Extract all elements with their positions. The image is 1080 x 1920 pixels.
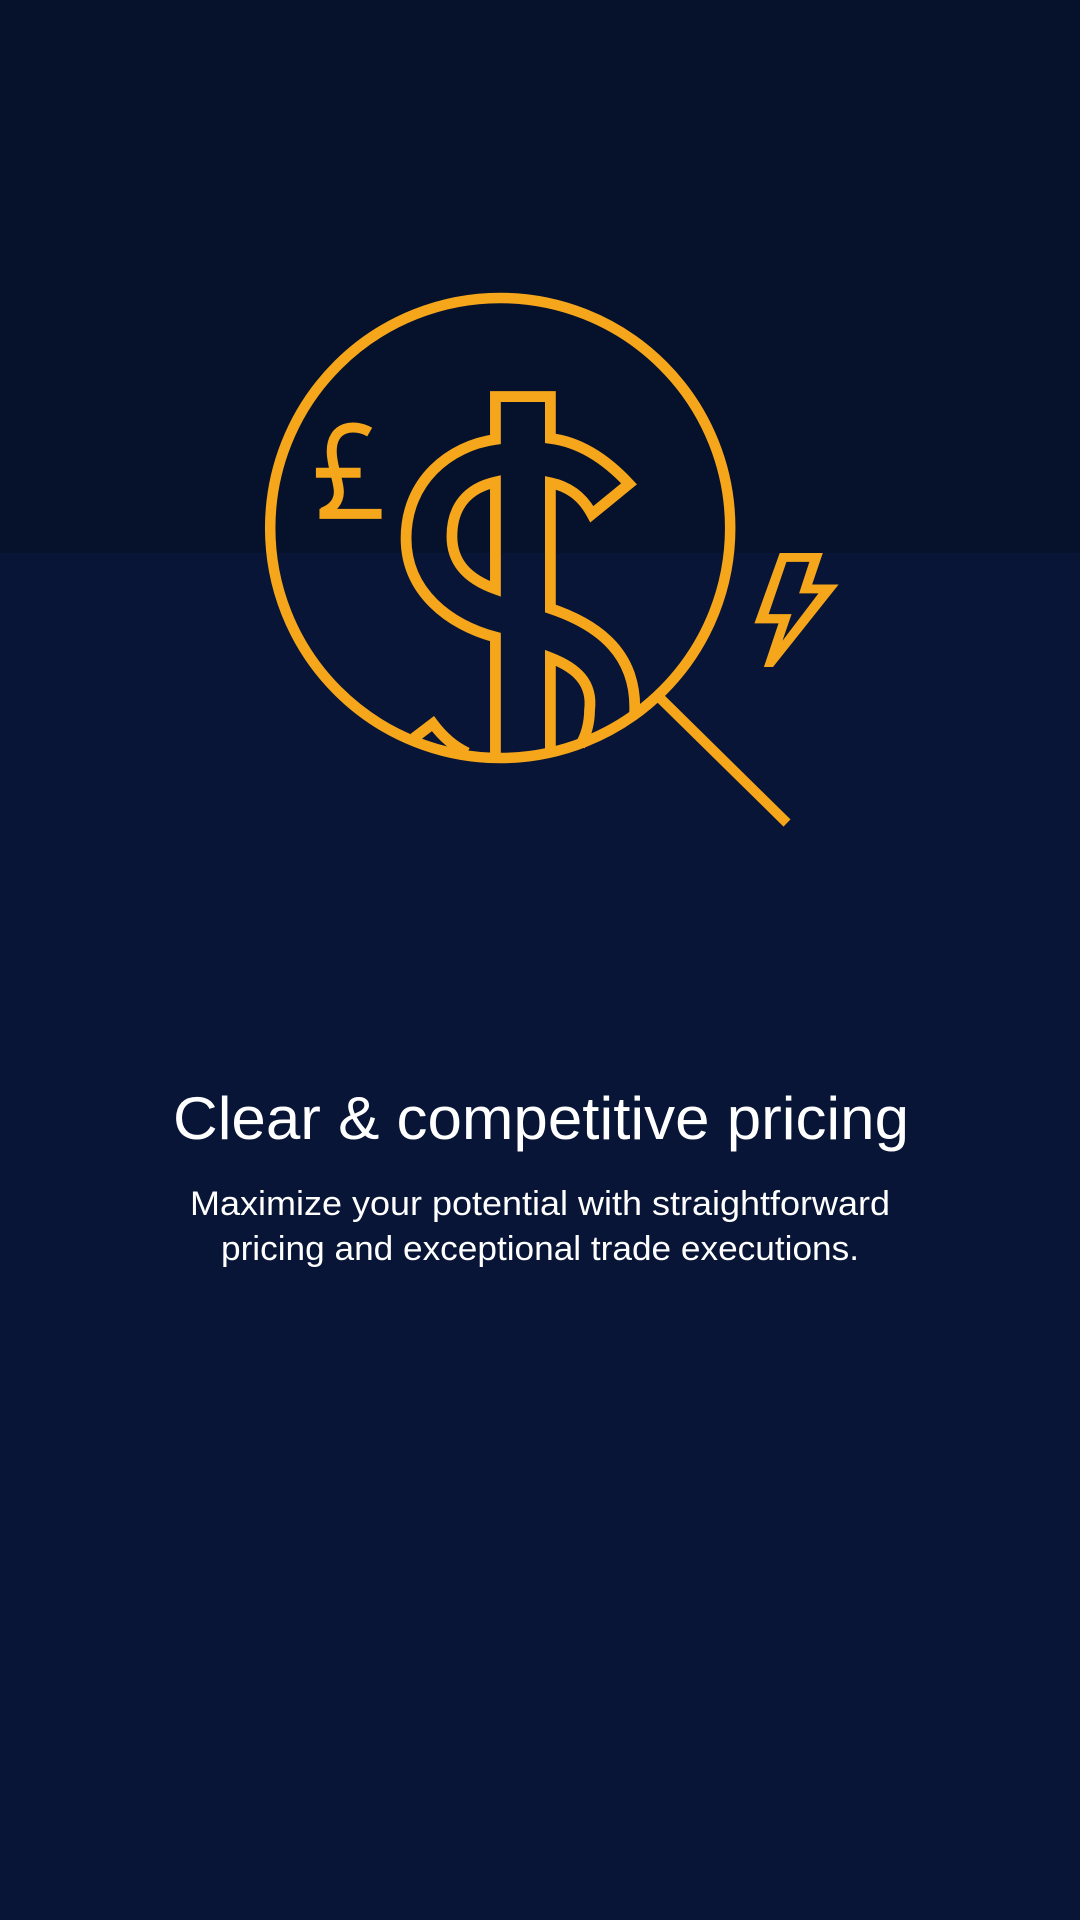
title: Clear & competitive pricing <box>173 1085 909 1152</box>
icon: lightning bolt <box>754 553 839 667</box>
icon: magnifying glass handle <box>661 699 787 823</box>
icon: dollar sign <box>406 397 635 755</box>
subtitle text block <box>190 1185 890 1268</box>
icon: magnifying glass over currency symbols <box>270 298 839 823</box>
subtitle line 2: pricing and exceptional trade executions. <box>221 1230 859 1268</box>
subtitle line 1: Maximize your potential with straightforward <box>190 1185 890 1223</box>
icon: magnifying glass lens <box>270 298 730 758</box>
icon: pound sign <box>316 428 382 514</box>
